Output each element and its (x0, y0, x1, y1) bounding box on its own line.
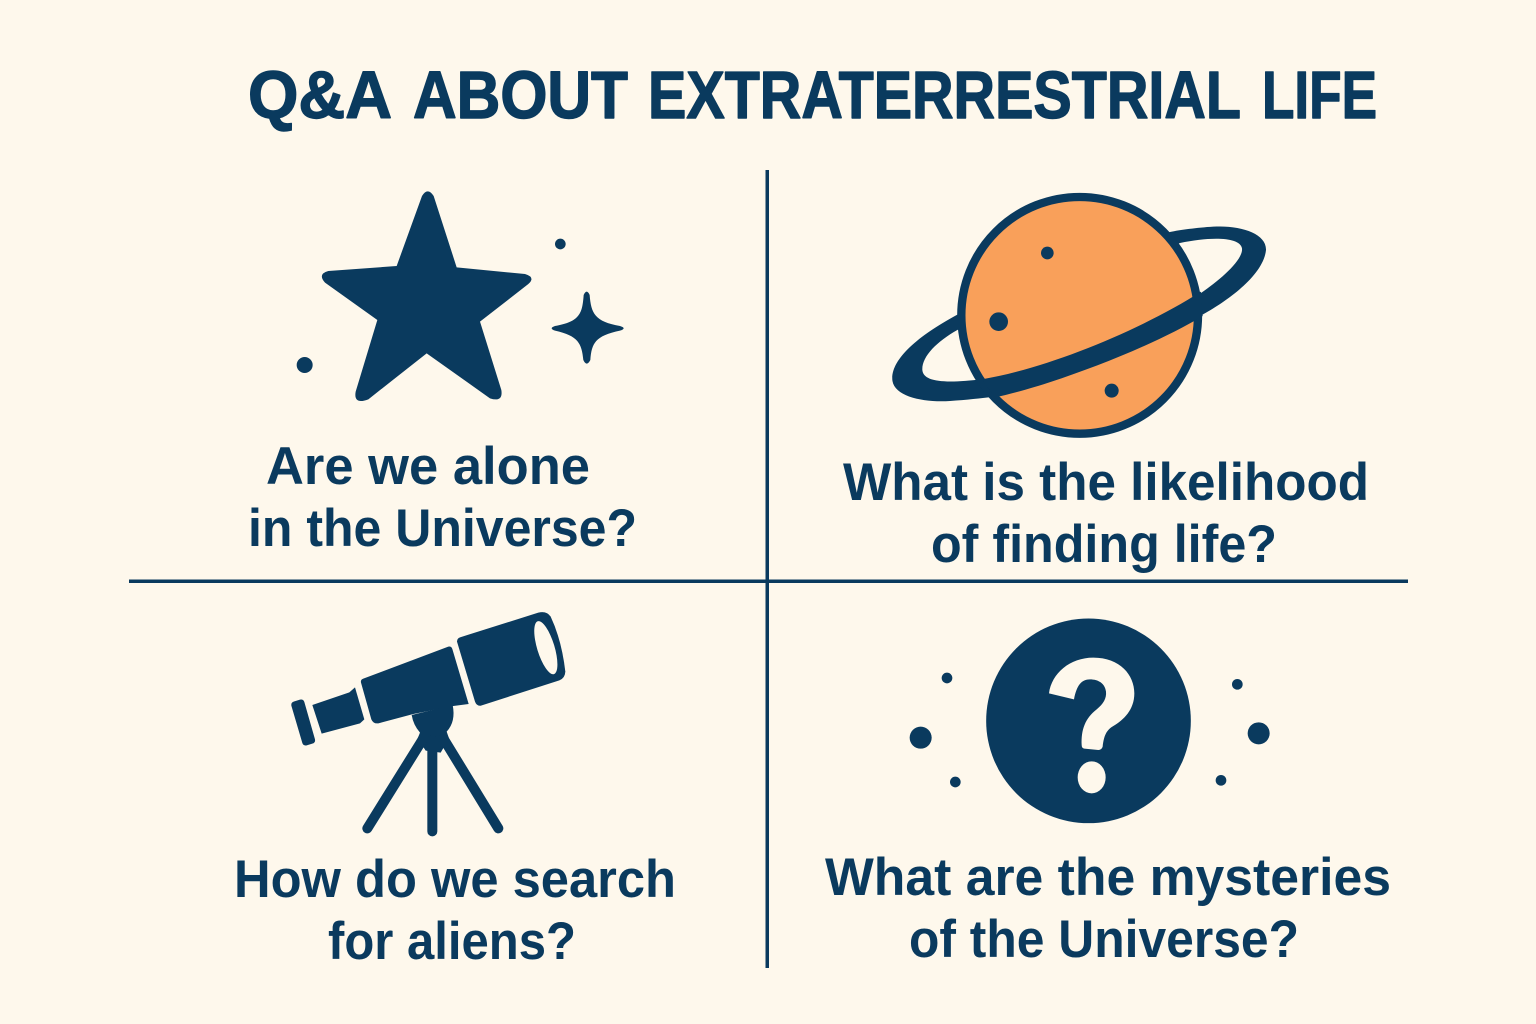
icon: ringed planet (892, 197, 1266, 434)
title: EXTRATERRESTRIAL (648, 58, 1241, 133)
icon: question mark circle (910, 618, 1270, 823)
question: how do we search: How do we search (234, 850, 676, 909)
question: likelihood: What is the likelihood (843, 453, 1369, 512)
question: mysteries: of the Universe? (909, 910, 1299, 969)
question: how do we search (234, 850, 676, 971)
question: are we alone (248, 437, 637, 558)
question: likelihood (843, 453, 1369, 574)
question: how do we search: for aliens? (328, 912, 576, 971)
panel: how do we search (234, 612, 676, 971)
title (248, 58, 1377, 133)
question: mysteries: What are the mysteries (825, 848, 1391, 907)
question: are we alone: Are we alone (266, 437, 590, 496)
title: ABOUT (413, 58, 628, 133)
question: are we alone: in the Universe? (248, 499, 637, 558)
panel: are we alone (248, 191, 637, 558)
panel: likelihood of finding life (843, 197, 1369, 574)
icon: stars (297, 191, 624, 401)
panel: mysteries of the universe (825, 618, 1391, 969)
question: likelihood: of finding life? (931, 515, 1277, 574)
title: LIFE (1262, 58, 1377, 133)
icon: telescope (291, 612, 565, 831)
title: Q&A (248, 58, 392, 133)
question: mysteries (825, 848, 1391, 969)
